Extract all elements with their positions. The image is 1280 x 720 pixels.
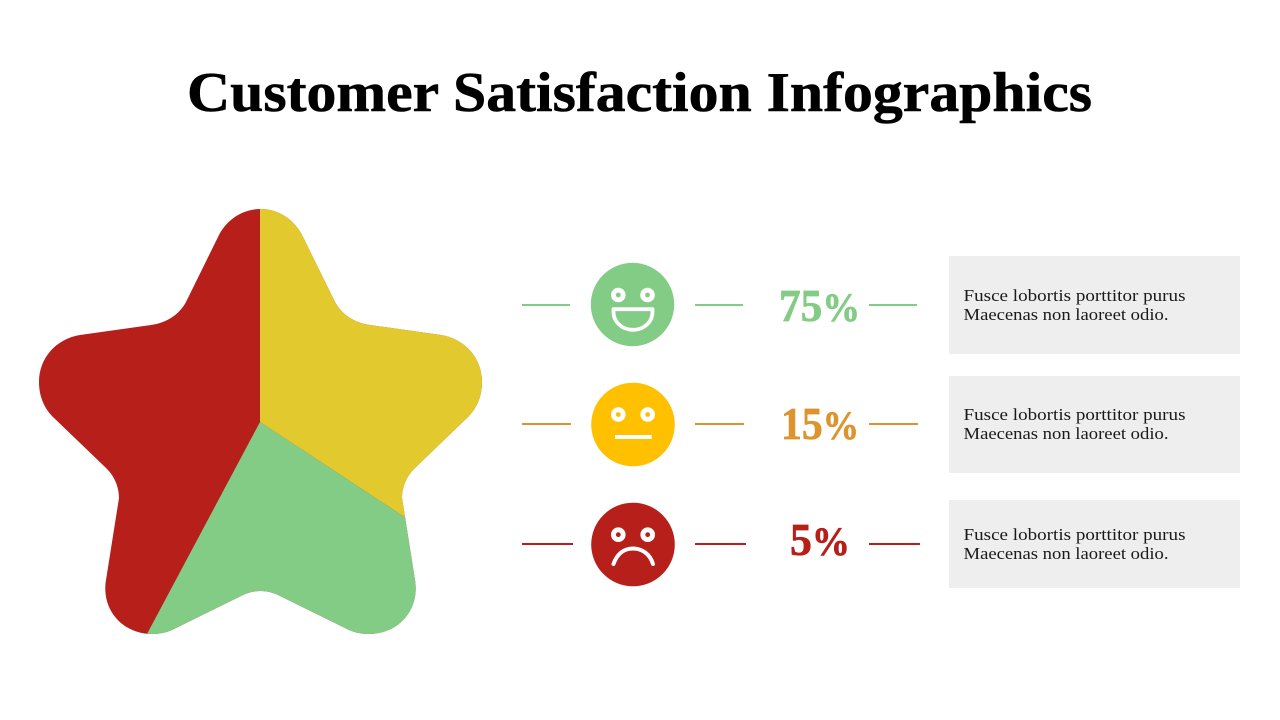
pie slice: yellow [260, 209, 482, 518]
text box: Fusce lobortis porttitor purus [964, 525, 1186, 544]
pie slice: red [39, 209, 482, 634]
text box: Maecenas non laoreet odio. [964, 305, 1168, 324]
percentage: 75% [779, 280, 860, 331]
connector lines [522, 543, 920, 545]
connector lines [522, 423, 918, 425]
text box [949, 376, 1240, 473]
row: 75% [522, 256, 1240, 354]
text box: Fusce lobortis porttitor purus [964, 286, 1186, 305]
connector lines [522, 304, 917, 306]
icon: happy face [591, 263, 674, 346]
percentage: 15% [781, 398, 859, 449]
icon: sad face [591, 503, 675, 586]
chart: star pie [39, 209, 482, 634]
text box: Maecenas non laoreet odio. [964, 544, 1168, 563]
text box: Fusce lobortis porttitor purus [964, 405, 1186, 424]
icon: neutral face [591, 383, 675, 466]
title: Customer Satisfaction Infographics [187, 62, 1092, 124]
pie slice: green [147, 422, 416, 634]
row: 15% [522, 376, 1240, 473]
row: 5% [522, 500, 1240, 588]
text box [949, 256, 1240, 354]
percentage: 5% [790, 514, 850, 565]
text box [949, 500, 1240, 588]
text box: Maecenas non laoreet odio. [964, 424, 1168, 443]
